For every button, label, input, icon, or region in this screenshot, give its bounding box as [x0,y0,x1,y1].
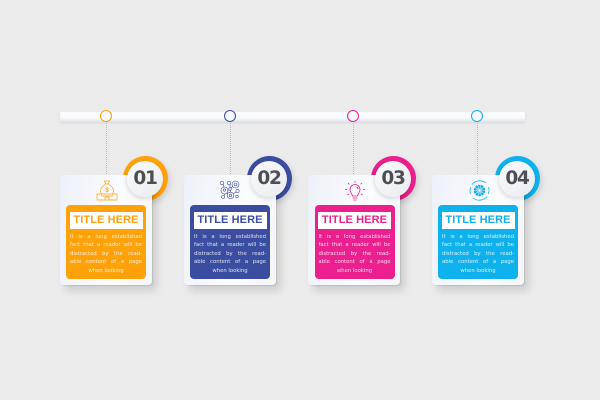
title 03 [318,212,391,229]
icon: network [220,180,240,200]
description 02: distracted by the read- [194,251,266,257]
description 04: It is a long established [442,234,514,240]
number 01: 01 [133,168,157,189]
number 02: 02 [257,168,281,189]
panel 03 [314,205,394,279]
number ring 04 [495,156,540,201]
card 04 [432,175,524,285]
description 03 [318,234,390,274]
timeline bar [60,112,525,122]
description 03: when looking [337,268,372,274]
description 01: able content of a page [70,259,142,265]
description 02: fact that a reader will be [194,242,266,248]
description 03: fact that a reader will be [318,242,390,248]
description 01: distracted by the read- [70,251,142,257]
icon: money bag [96,180,118,200]
number 04: 04 [505,168,529,189]
icon: light bulb [345,181,365,200]
icon: gear cycle [470,180,490,201]
title 01: TITLE HERE [73,214,139,226]
timeline dot 01 [100,110,112,122]
title 04: TITLE HERE [445,214,511,226]
connector 03 [352,123,354,176]
description 01: It is a long established [70,234,142,240]
card 01 [60,175,152,285]
number ring 03 [371,156,416,201]
number 03 [375,161,411,197]
number 01 [127,161,163,197]
connector 04 [476,123,478,176]
number ring 01 [123,156,168,201]
title 01 [70,212,142,229]
title 04 [442,212,514,229]
description 03: distracted by the read- [318,251,390,257]
description 03: able content of a page [318,259,390,265]
title 02: TITLE HERE [197,214,263,226]
timeline dot 04 [471,110,483,122]
description 02: when looking [212,268,248,274]
description 04: fact that a reader will be [442,242,514,248]
description 03: It is a long established [318,234,390,240]
connector 02 [230,123,231,176]
number ring 02 [247,156,292,201]
number 03: 03 [381,168,405,189]
title 02 [194,212,266,229]
icon: money bag: $ [105,188,109,194]
description 02: It is a long established [194,234,266,240]
connector 01 [106,123,107,176]
timeline dot 03 [347,110,359,122]
panel 04 [438,205,518,279]
card 02 [184,175,276,285]
description 01: when looking [88,268,124,274]
description 04 [442,234,514,274]
description 01 [70,234,142,274]
timeline dot 02 [224,110,236,122]
description 02: able content of a page [194,259,266,265]
panel 02 [190,205,270,279]
panel 01 [66,205,146,279]
description 02 [194,234,266,274]
description 04: when looking [460,268,496,274]
description 04: distracted by the read- [442,251,514,257]
title 03: TITLE HERE [322,214,387,226]
number 02 [251,161,287,197]
card 03 [308,175,400,285]
number 04 [499,161,535,197]
description 04: able content of a page [442,259,514,265]
description 01: fact that a reader will be [70,242,142,248]
